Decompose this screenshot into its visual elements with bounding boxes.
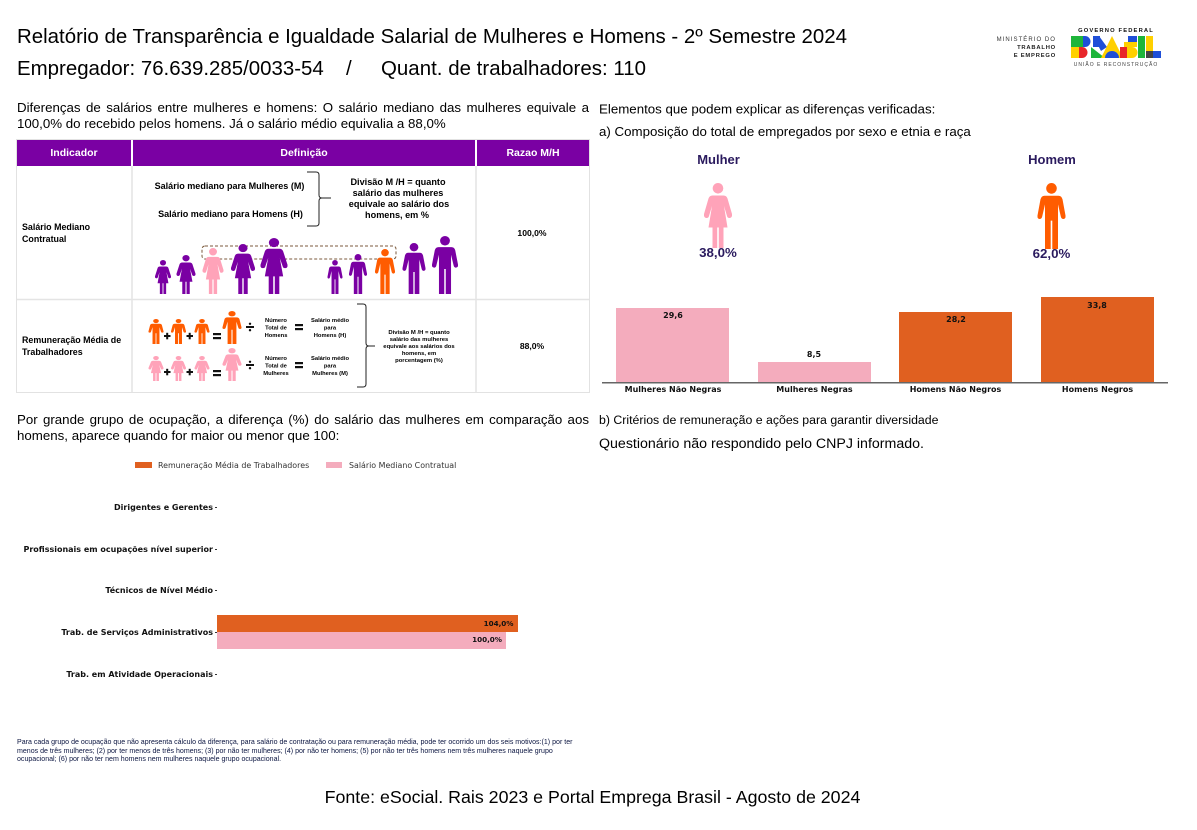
table (16, 140, 590, 392)
bar chart: diferença por grupo de ocupação: Trab. em Atividade Operacionais (66, 670, 213, 679)
bar chart: composição por sexo e raça: Homens Negros (1062, 385, 1133, 394)
bar chart: composição por sexo e raça: 29,6 (663, 311, 683, 320)
formula: women average: Mulheres (263, 371, 289, 377)
title: Relatório de Transparência e Igualdade Salarial de Mulheres e Homens - 2º Semestre 2024 (17, 25, 847, 48)
section text: elementos: a) Composição do total de empregados por sexo e etnia e raça (599, 124, 971, 139)
footnote: Para cada grupo de ocupação que não apresenta cálculo da diferença, para salário de contratação ou para remuneração média, pode ter ocorrido um dos seis motivos:(1) por ter menos de três mulheres; (2) por ter menos de três homens; (3) por não ter mulheres; (4) por não ter homens; (5) por não ter três homens nem três mulheres naquele grupo ocupacional; (6) por não ter nem homens nem mulheres naquele grupo ocupacional. (17, 739, 572, 763)
logo: Ministério do Trabalho e Emprego: E EMPREGO (1014, 53, 1056, 59)
logo: Ministério do Trabalho e Emprego (997, 36, 1056, 59)
formula: women average: Mulheres (M) (312, 371, 348, 377)
legend (135, 460, 456, 470)
median definition text (155, 177, 449, 220)
bar chart: composição por sexo e raça: 33,8 (1087, 301, 1107, 310)
panel: Mulher (697, 152, 740, 260)
section text: elementos (599, 102, 971, 139)
median definition text: Salário mediano para Homens (H) (158, 209, 303, 219)
formula: men average: Total de (265, 326, 288, 332)
logo: Ministério do Trabalho e Emprego: MINISTÉRIO DO (997, 36, 1056, 43)
bar chart: diferença por grupo de ocupação: Dirigentes e Gerentes (114, 503, 213, 512)
value: razão média: 88,0% (520, 341, 545, 351)
formula: men average: Número (265, 318, 287, 324)
median definition text: Salário mediano para Mulheres (M) (155, 181, 304, 191)
bar chart: composição por sexo e raça (602, 297, 1168, 394)
median brace (307, 172, 331, 226)
formula: men average: para (324, 326, 337, 332)
title: Quant. de trabalhadores: 110 (381, 57, 646, 80)
source: Fonte: eSocial. Rais 2023 e Portal Emprega Brasil - Agosto de 2024 (325, 787, 860, 807)
average division text (383, 330, 455, 364)
title: Empregador: 76.639.285/0033-54 (17, 57, 324, 80)
table header: Indicador (50, 147, 98, 159)
section text: critérios (599, 413, 939, 452)
row label: Salário Mediano Contratual: Salário Mediano (22, 222, 91, 232)
panel: Mulher: 38,0% (699, 245, 737, 260)
panel: Homem: Homem (1028, 152, 1076, 167)
bar chart: diferença por grupo de ocupação: Técnicos de Nível Médio (105, 585, 213, 595)
logo: Ministério do Trabalho e Emprego: TRABALHO (1017, 45, 1056, 51)
bar chart: diferença por grupo de ocupação (23, 503, 518, 679)
row label: Remuneração Média de Trabalhadores: Trabalhadores (22, 347, 83, 357)
bar chart: composição por sexo e raça: Mulheres Negras (776, 385, 853, 394)
median definition text: salário das mulheres (353, 188, 443, 198)
bar chart: composição por sexo e raça: Homens Não Negros (910, 385, 1002, 394)
formula: women average: para (324, 364, 337, 370)
median definition text: homens, em % (365, 210, 429, 220)
panel: Homem (1028, 152, 1076, 261)
panel: Homem: 62,0% (1033, 246, 1071, 261)
bar chart: diferença por grupo de ocupação: Profissionais em ocupações nível superior (23, 545, 213, 554)
formula: men average: Homens (265, 333, 287, 339)
bar chart: composição por sexo e raça: Mulheres Não Negras (625, 385, 722, 394)
average division text: Divisão M /H = quanto (388, 330, 450, 336)
row label: Salário Mediano Contratual: Contratual (22, 234, 66, 244)
formula: women average: Total de (265, 364, 288, 370)
formula: women average (148, 348, 349, 381)
bar chart: diferença por grupo de ocupação: 104,0% (484, 619, 514, 628)
median definition text: equivale ao salário dos (349, 199, 449, 209)
formula: men average: Salário médio (311, 318, 349, 324)
average division text: equivale aos salários dos (383, 344, 455, 350)
title (17, 25, 847, 80)
section text: critérios: Questionário não respondido pelo CNPJ informado. (599, 436, 924, 452)
title: / (346, 57, 352, 80)
average brace (357, 304, 375, 387)
bar chart: diferença por grupo de ocupação: Trab. de Serviços Administrativos (61, 628, 213, 637)
table header: Razao M/H (506, 147, 560, 159)
bar chart: diferença por grupo de ocupação: 100,0% (472, 635, 502, 644)
average division text: homens, em (402, 351, 436, 357)
logo: Governo Federal Brasil: UNIÃO E RECONSTRUÇÃO (1074, 61, 1158, 68)
logo: Governo Federal Brasil: GOVERNO FEDERAL (1078, 28, 1154, 34)
row label: Remuneração Média de Trabalhadores (22, 335, 121, 357)
average division text: porcentagem (%) (395, 358, 443, 364)
table header (17, 140, 589, 166)
average division text: salário das mulheres (390, 337, 449, 343)
icon row: women (155, 238, 288, 294)
row label: Remuneração Média de Trabalhadores: Remuneração Média de (22, 335, 121, 345)
formula: men average (148, 311, 349, 344)
median definition text: Divisão M /H = quanto (350, 177, 446, 187)
formula: men average: Homens (H) (314, 333, 346, 339)
row label: Salário Mediano Contratual (22, 222, 91, 244)
icon row: men (327, 236, 458, 294)
formula: women average: Salário médio (311, 356, 349, 362)
logo: Governo Federal Brasil (1071, 28, 1161, 68)
formula: women average: Número (265, 356, 287, 362)
text block: grande grupo de ocupação: Por grande grupo de ocupação, a diferença (%) do salário das mulheres em comparação aos homens, aparece quando for maior ou menor que 100: (17, 412, 589, 443)
legend: Remuneração Média de Trabalhadores (158, 460, 309, 470)
legend: Salário Mediano Contratual (349, 461, 456, 470)
value: razão mediana: 100,0% (517, 228, 547, 238)
bar chart: composição por sexo e raça: 8,5 (807, 350, 822, 359)
section text: elementos: Elementos que podem explicar as diferenças verificadas: (599, 102, 935, 116)
table header: Definição (280, 147, 328, 159)
panel: Mulher: Mulher (697, 152, 740, 167)
bar chart: composição por sexo e raça: 28,2 (946, 315, 966, 324)
text block: diferenças de salários: Diferenças de salários entre mulheres e homens: O salário mediano das mulheres equivale a 100,0% do recebido pelos homens. Já o salário médio equivalia a 88,0% (17, 100, 589, 131)
dashed highlight box (202, 246, 396, 259)
section text: critérios: b) Critérios de remuneração e ações para garantir diversidade (599, 413, 939, 427)
